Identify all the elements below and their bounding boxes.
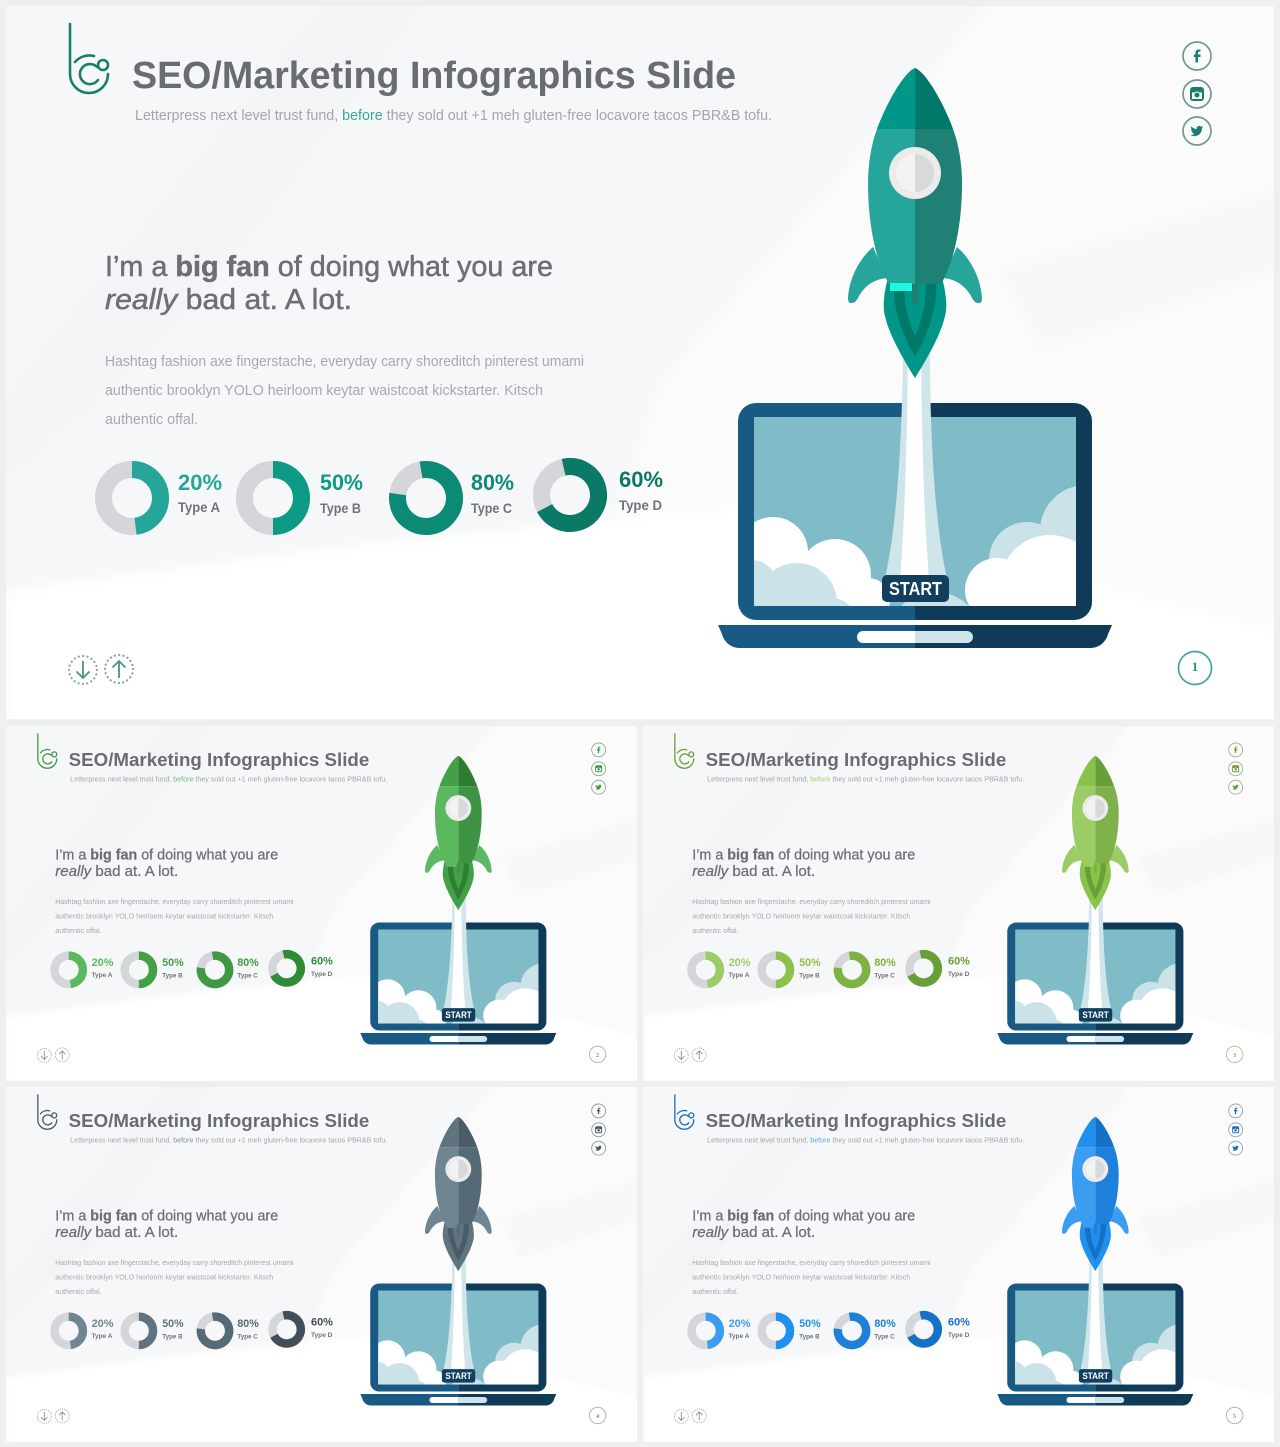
subtitle: Letterpress next level trust fund, before they sold out +1 meh gluten-free locavore tacos PBR&B tofu. xyxy=(707,775,1024,784)
donut: Type D: Type D xyxy=(311,971,333,978)
body text: Hashtag fashion axe fingerstache, everyday carry shoreditch pinterest umami xyxy=(55,897,294,906)
donut: Type D: 60% xyxy=(948,955,970,967)
laptop xyxy=(997,1284,1203,1425)
heading xyxy=(105,251,553,316)
navigation arrows xyxy=(37,1048,69,1062)
donut: Type C: 80% xyxy=(237,957,259,969)
donut: Type C: Type C xyxy=(237,1333,258,1340)
body text: authentic brooklyn YOLO heirloom keytar waistcoat kickstarter. Kitsch xyxy=(692,1273,910,1282)
panel: slate slide xyxy=(6,1084,640,1447)
donut: Type D: Type D xyxy=(311,1332,333,1339)
logo xyxy=(70,24,108,93)
page number: 5 xyxy=(1233,1413,1236,1420)
laptop xyxy=(997,923,1203,1064)
start button: START xyxy=(445,1010,472,1020)
body text: authentic offal. xyxy=(692,926,739,935)
subtitle: Letterpress next level trust fund, before they sold out +1 meh gluten-free locavore tacos PBR&B tofu. xyxy=(707,1136,1024,1145)
donut: Type A: 20% xyxy=(729,957,751,969)
navigation arrows xyxy=(674,1409,706,1423)
social icons xyxy=(1229,743,1243,794)
donut: Type B: Type B xyxy=(162,972,183,979)
donut: Type B: Type B xyxy=(799,972,820,979)
donut: Type D: Type D xyxy=(948,1332,970,1339)
donut: Type D: 60% xyxy=(311,955,333,967)
body text: Hashtag fashion axe fingerstache, everyday carry shoreditch pinterest umami xyxy=(692,897,931,906)
donut: Type C xyxy=(199,953,259,986)
rocket xyxy=(425,756,492,910)
heading: I’m a big fan of doing what you are xyxy=(692,847,915,863)
rocket trail xyxy=(443,1257,474,1371)
donut: Type B: Type B xyxy=(320,501,361,516)
donut: Type B: 50% xyxy=(162,957,184,969)
laptop xyxy=(360,923,566,1064)
body text: Hashtag fashion axe fingerstache, everyday carry shoreditch pinterest umami xyxy=(692,1258,931,1267)
donut: Type A xyxy=(55,956,114,984)
title: SEO/Marketing Infographics Slide xyxy=(69,750,369,771)
heading xyxy=(692,847,915,880)
donut: Type B: 50% xyxy=(799,1318,821,1330)
body text xyxy=(105,354,584,428)
donut: Type A: 20% xyxy=(92,957,114,969)
donut: Type D: 60% xyxy=(619,467,663,492)
donut: Type B: Type B xyxy=(799,1333,820,1340)
donut: Type A xyxy=(104,470,222,526)
donut: Type A: Type A xyxy=(92,1333,113,1340)
donut: Type C: Type C xyxy=(874,972,895,979)
donut: Type C: 80% xyxy=(237,1318,259,1330)
donut: Type D xyxy=(907,951,970,985)
title: SEO/Marketing Infographics Slide xyxy=(706,750,1006,771)
panel: green slide xyxy=(6,723,640,1086)
rocket xyxy=(1062,1117,1129,1271)
rocket trail xyxy=(885,350,947,578)
laptop xyxy=(360,1284,566,1425)
donut: Type D xyxy=(270,1312,333,1346)
heading xyxy=(55,1208,278,1241)
donut: Type C: Type C xyxy=(237,972,258,979)
body text: Hashtag fashion axe fingerstache, everyday carry shoreditch pinterest umami xyxy=(105,354,584,370)
donut: Type D: 60% xyxy=(948,1316,970,1328)
donut: Type A: 20% xyxy=(178,470,222,495)
panel: teal slide xyxy=(6,0,1280,730)
donut: Type A: Type A xyxy=(92,972,113,979)
donut: Type C: Type C xyxy=(874,1333,895,1340)
donut: Type A: 20% xyxy=(729,1318,751,1330)
body text: authentic brooklyn YOLO heirloom keytar waistcoat kickstarter. Kitsch xyxy=(55,1273,273,1282)
heading: really bad at. A lot. xyxy=(692,1225,815,1241)
page number xyxy=(589,1407,606,1424)
logo xyxy=(675,1095,694,1129)
page number xyxy=(1178,652,1212,684)
donut: Type D xyxy=(907,1312,970,1346)
donut: Type C: 80% xyxy=(874,957,896,969)
page number: 1 xyxy=(1192,659,1198,674)
donut: Type C xyxy=(836,1314,896,1347)
donut: Type B: Type B xyxy=(162,1333,183,1340)
donut: Type A xyxy=(55,1317,114,1345)
page number: 2 xyxy=(596,1052,599,1059)
heading: I’m a big fan of doing what you are xyxy=(55,847,278,863)
body text: authentic brooklyn YOLO heirloom keytar waistcoat kickstarter. Kitsch xyxy=(692,912,910,921)
start button: START xyxy=(889,579,942,599)
logo xyxy=(38,1095,57,1129)
donut: Type B xyxy=(125,956,184,984)
body text: authentic brooklyn YOLO heirloom keytar waistcoat kickstarter. Kitsch xyxy=(55,912,273,921)
page number: 3 xyxy=(1233,1052,1236,1059)
navigation arrows xyxy=(674,1048,706,1062)
start button xyxy=(442,1369,475,1383)
donut: Type B xyxy=(762,1317,821,1345)
donut: Type B: 50% xyxy=(162,1318,184,1330)
donut: Type D: 60% xyxy=(311,1316,333,1328)
start button xyxy=(1079,1008,1112,1022)
heading: I’m a big fan of doing what you are xyxy=(55,1208,278,1224)
donut: Type A: 20% xyxy=(92,1318,114,1330)
navigation arrows xyxy=(37,1409,69,1423)
body text: Hashtag fashion axe fingerstache, everyday carry shoreditch pinterest umami xyxy=(55,1258,294,1267)
donut: Type C xyxy=(199,1314,259,1347)
rocket xyxy=(425,1117,492,1271)
subtitle: Letterpress next level trust fund, before they sold out +1 meh gluten-free locavore tacos PBR&B tofu. xyxy=(70,775,387,784)
heading xyxy=(692,1208,915,1241)
title: SEO/Marketing Infographics Slide xyxy=(706,1111,1006,1132)
rocket trail xyxy=(1080,1257,1111,1371)
donut: Type D xyxy=(270,951,333,985)
donut: Type B xyxy=(762,956,821,984)
donut: Type D: Type D xyxy=(948,971,970,978)
body text xyxy=(55,1258,294,1296)
donut: Type D: Type D xyxy=(619,498,662,513)
panel: light green slide xyxy=(643,723,1277,1086)
body text xyxy=(692,1258,931,1296)
laptop xyxy=(718,403,1132,688)
donut: Type C xyxy=(393,465,514,531)
body text xyxy=(55,897,294,935)
start button xyxy=(1079,1369,1112,1383)
start button: START xyxy=(445,1371,472,1381)
social icons xyxy=(592,1104,606,1155)
navigation arrows xyxy=(69,655,133,684)
subtitle: Letterpress next level trust fund, before they sold out +1 meh gluten-free locavore tacos PBR&B tofu. xyxy=(70,1136,387,1145)
donut: Type A: Type A xyxy=(729,972,750,979)
body text: authentic offal. xyxy=(55,926,102,935)
donut: Type B: 50% xyxy=(799,957,821,969)
start button: START xyxy=(1082,1371,1109,1381)
rocket xyxy=(848,68,982,378)
rocket trail xyxy=(443,896,474,1010)
donut: Type B xyxy=(125,1317,184,1345)
title: SEO/Marketing Infographics Slide xyxy=(69,1111,369,1132)
donut: Type A: Type A xyxy=(729,1333,750,1340)
start button xyxy=(882,575,949,602)
logo xyxy=(38,734,57,768)
heading xyxy=(55,847,278,880)
donut: Type B: 50% xyxy=(320,470,363,495)
rocket xyxy=(1062,756,1129,910)
start button: START xyxy=(1082,1010,1109,1020)
social icons xyxy=(592,743,606,794)
body text xyxy=(692,897,931,935)
donut: Type A: Type A xyxy=(178,500,220,515)
page number xyxy=(589,1046,606,1063)
social icons xyxy=(1229,1104,1243,1155)
start button xyxy=(442,1008,475,1022)
title: SEO/Marketing Infographics Slide xyxy=(132,55,736,97)
heading: I’m a big fan of doing what you are xyxy=(105,251,553,283)
heading: I’m a big fan of doing what you are xyxy=(692,1208,915,1224)
heading: really bad at. A lot. xyxy=(105,284,352,316)
heading: really bad at. A lot. xyxy=(692,864,815,880)
logo xyxy=(675,734,694,768)
donut: Type B xyxy=(244,470,363,526)
heading: really bad at. A lot. xyxy=(55,864,178,880)
body text: authentic offal. xyxy=(55,1287,102,1296)
donut: Type C: 80% xyxy=(471,470,514,495)
subtitle: Letterpress next level trust fund, before they sold out +1 meh gluten-free locavore tacos PBR&B tofu. xyxy=(135,108,772,124)
donut: Type C: Type C xyxy=(471,501,512,516)
donut: Type C xyxy=(836,953,896,986)
heading: really bad at. A lot. xyxy=(55,1225,178,1241)
body text: authentic offal. xyxy=(105,412,198,428)
page number: 4 xyxy=(596,1413,600,1420)
body text: authentic brooklyn YOLO heirloom keytar waistcoat kickstarter. Kitsch xyxy=(105,383,543,399)
page number xyxy=(1226,1407,1243,1424)
page number xyxy=(1226,1046,1243,1063)
donut: Type C: 80% xyxy=(874,1318,896,1330)
donut: Type A xyxy=(692,956,751,984)
rocket trail xyxy=(1080,896,1111,1010)
body text: authentic offal. xyxy=(692,1287,739,1296)
panel: blue slide xyxy=(643,1084,1277,1447)
social icons xyxy=(1183,42,1211,145)
donut: Type A xyxy=(692,1317,751,1345)
donut: Type D xyxy=(536,461,663,529)
